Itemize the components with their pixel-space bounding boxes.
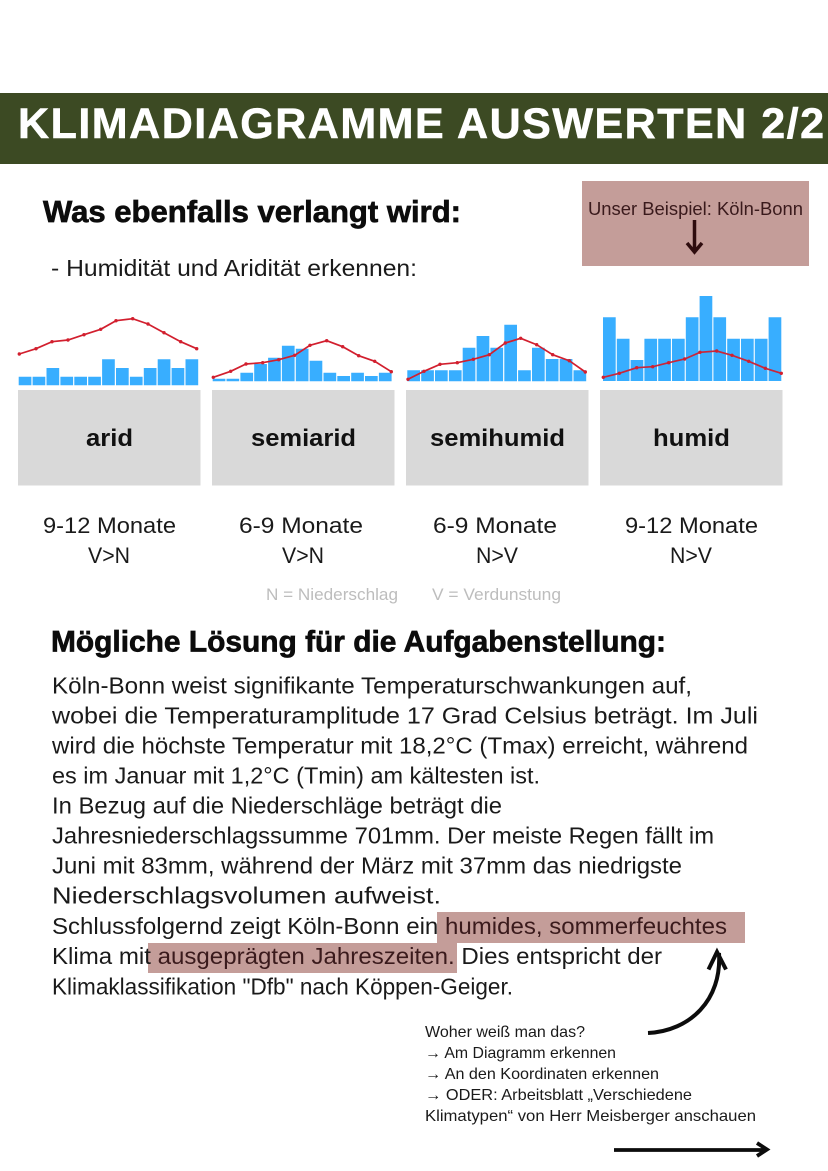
panel: arid: arid xyxy=(86,425,133,452)
text block: how to tell xyxy=(425,1024,756,1125)
legend: abbreviations xyxy=(266,585,561,604)
text block: solution with highlights: Köln-Bonn weist signifikante Temperaturschwankungen auf, xyxy=(52,672,692,698)
text block: solution with highlights: es im Januar mit 1,2°C (Tmin) am kältesten ist. xyxy=(52,762,540,788)
text block: solution with highlights: Klimaklassifikation "Dfb" nach Köppen-Geiger. xyxy=(52,974,513,1000)
text block: solution with highlights: Klima mit ausgeprägten Jahreszeiten. Dies entspricht der xyxy=(52,943,662,969)
arrow: next page xyxy=(614,1143,767,1156)
text block: solution with highlights: wobei die Temperaturamplitude 17 Grad Celsius beträgt. Im Juli xyxy=(51,702,758,728)
panel: humid: humid xyxy=(653,425,730,452)
text block: how to tell: Klimatypen“ von Herr Meisberger anschauen xyxy=(425,1108,756,1125)
callout: example station xyxy=(582,181,809,266)
panel: arid: V>N xyxy=(88,543,130,568)
callout: example station: Unser Beispiel: Köln-Bonn xyxy=(588,199,803,219)
climate chart: humid xyxy=(603,296,781,381)
climate chart: semiarid xyxy=(213,341,392,381)
climate chart: arid xyxy=(19,319,198,385)
text block: solution with highlights: Jahresniederschlagssumme 701mm. Der meiste Regen fällt im xyxy=(52,822,714,848)
text block: how to tell: → An den Koordinaten erkennen xyxy=(425,1066,659,1083)
text block: solution with highlights: Schlussfolgernd zeigt Köln-Bonn ein humides, sommerfeuchtes xyxy=(52,913,727,939)
climate chart: semihumid xyxy=(407,325,586,381)
text block: solution with highlights xyxy=(51,672,758,1000)
heading: requirements: Was ebenfalls verlangt wird: xyxy=(43,194,461,229)
text block: solution with highlights: Juni mit 83mm, während der März mit 37mm das niedrigste xyxy=(52,852,682,878)
text block: solution with highlights: wird die höchste Temperatur mit 18,2°C (Tmax) erreicht, während xyxy=(51,732,748,758)
panel: humid: 9-12 Monate xyxy=(625,513,758,538)
arrow: curved to highlight xyxy=(648,952,726,1033)
panel: semiarid: 6-9 Monate xyxy=(239,513,363,538)
title banner: KLIMADIAGRAMME AUSWERTEN 2/2 xyxy=(18,100,824,148)
panel: arid: 9-12 Monate xyxy=(43,513,176,538)
text block: how to tell: Woher weiß man das? xyxy=(425,1024,585,1041)
panel: humid: N>V xyxy=(670,543,712,568)
legend: abbreviations: N = Niederschlag xyxy=(266,585,398,604)
subheading: humidity and aridity: - Humidität und Aridität erkennen: xyxy=(51,255,417,281)
panel: semiarid: semiarid xyxy=(251,425,356,452)
heading: possible solution: Mögliche Lösung für die Aufgabenstellung: xyxy=(51,626,666,658)
panel: semihumid: 6-9 Monate xyxy=(433,513,557,538)
panel: semihumid: semihumid xyxy=(430,425,565,452)
text block: solution with highlights: In Bezug auf die Niederschläge beträgt die xyxy=(52,792,502,818)
panel: arid xyxy=(18,319,200,568)
legend: abbreviations: V = Verdunstung xyxy=(432,585,561,604)
panel: semiarid xyxy=(212,341,394,568)
text block: solution with highlights: Niederschlagsvolumen aufweist. xyxy=(52,882,441,908)
panel: semihumid xyxy=(406,325,588,568)
panel: semiarid: V>N xyxy=(282,543,324,568)
text block: how to tell: → Am Diagramm erkennen xyxy=(425,1045,616,1062)
title banner xyxy=(0,93,828,164)
panel: semihumid: N>V xyxy=(476,543,518,568)
panel: humid xyxy=(600,296,782,568)
text block: how to tell: → ODER: Arbeitsblatt „Verschiedene xyxy=(425,1087,692,1104)
